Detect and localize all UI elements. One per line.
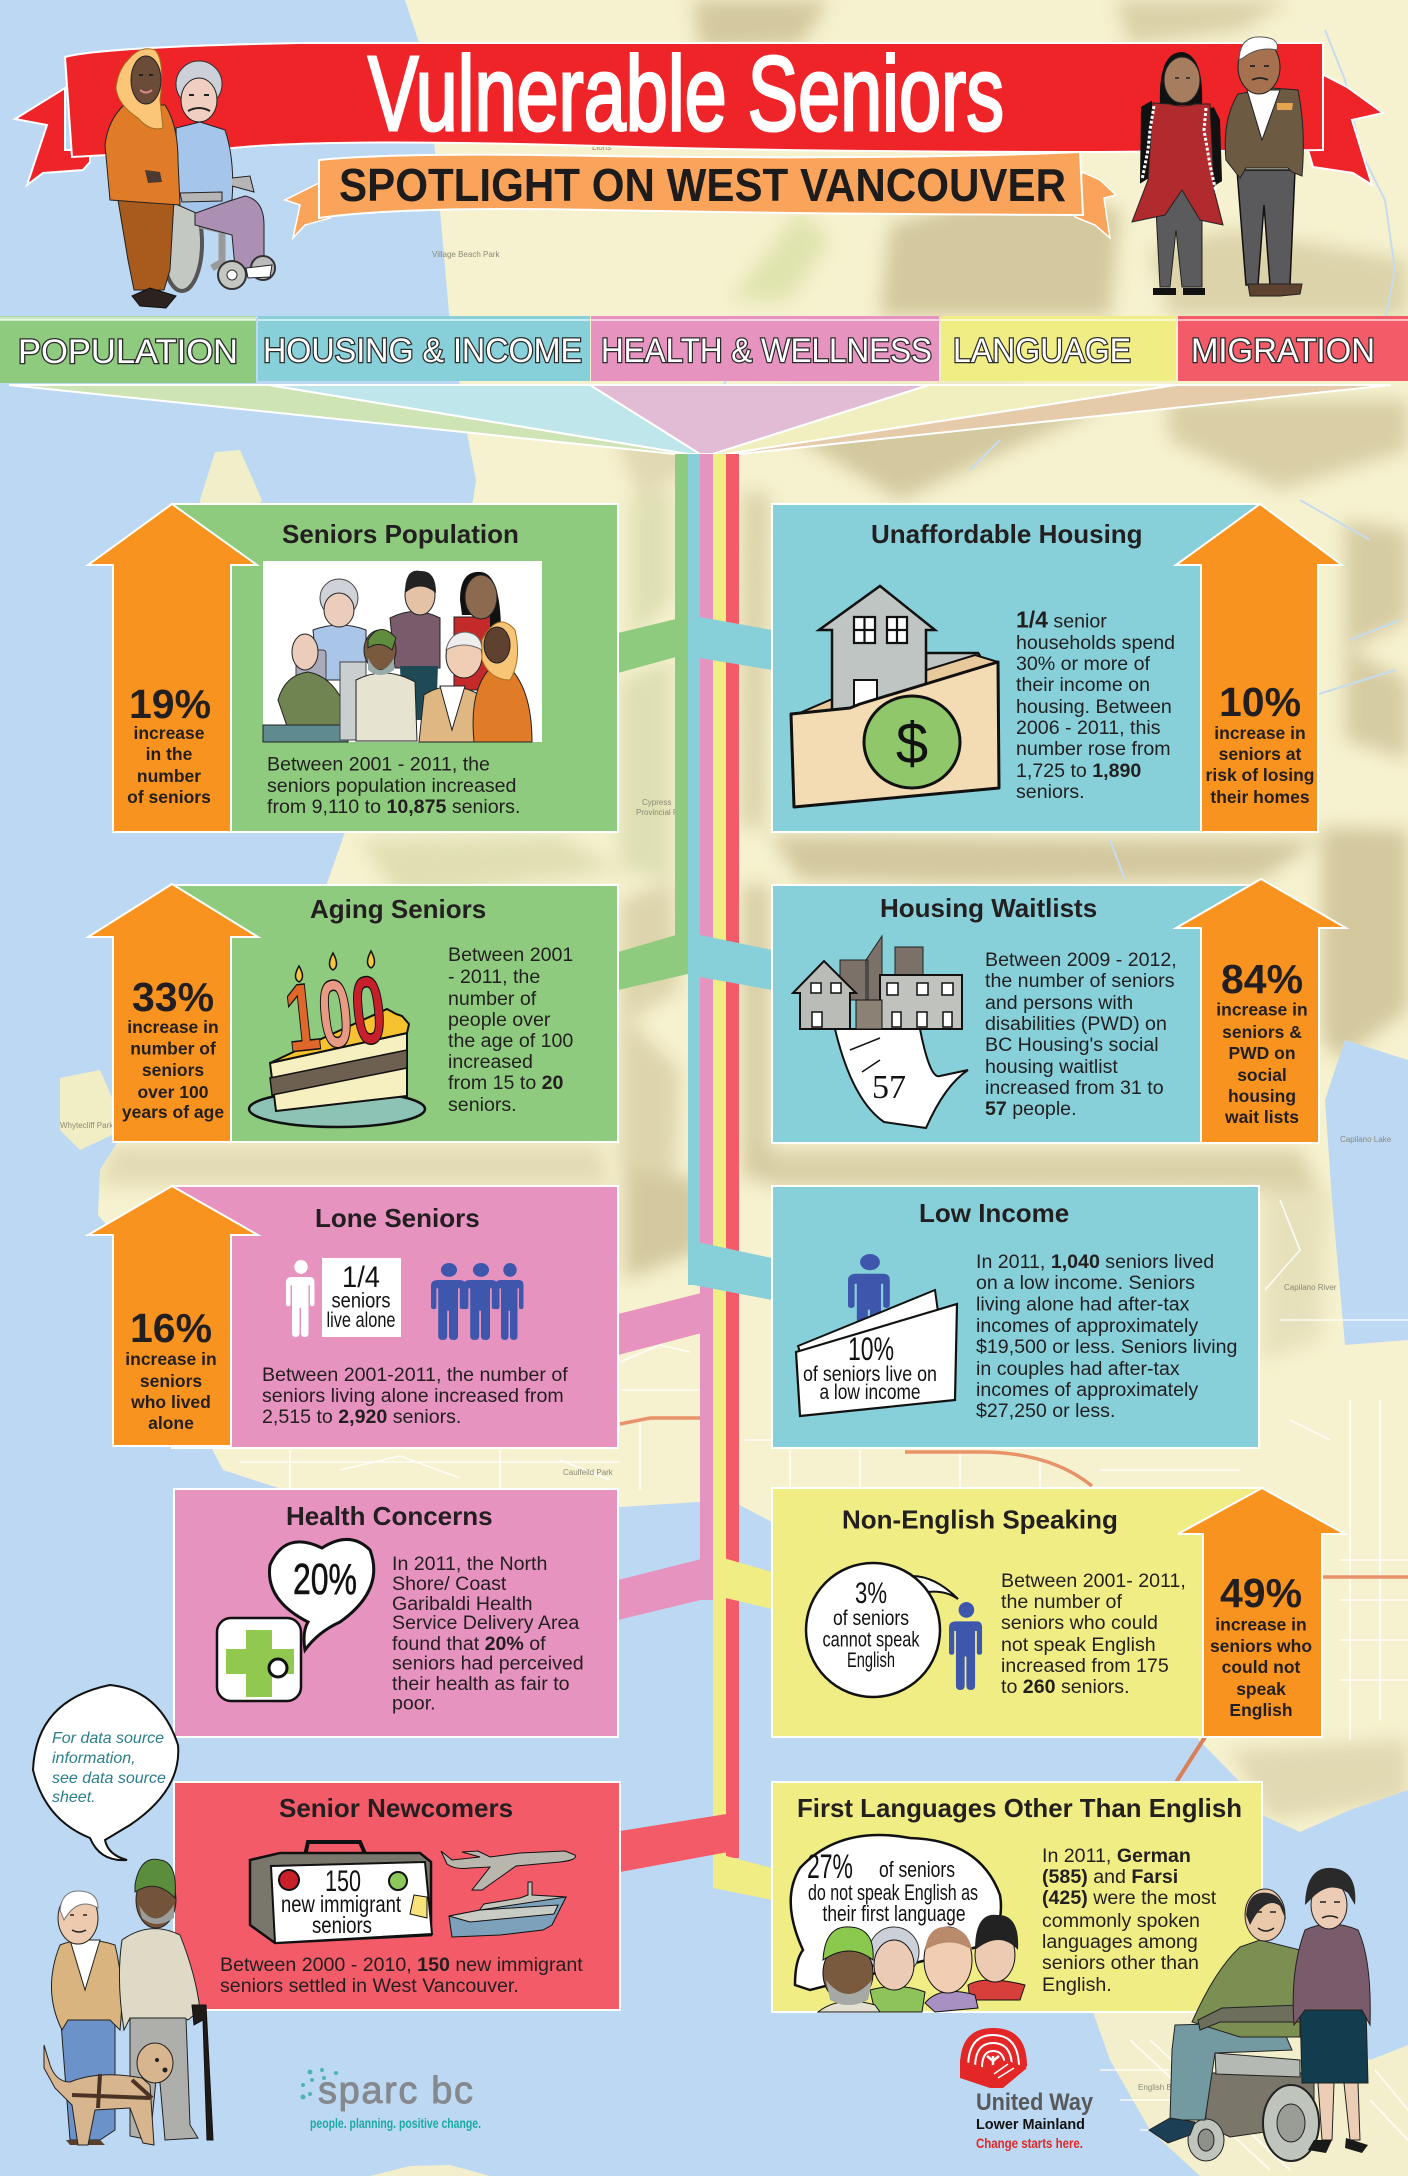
illustration: house in envelope: $ xyxy=(896,711,928,776)
map background: Village Beach Park xyxy=(432,250,500,259)
body text: Garibaldi Health xyxy=(392,1593,532,1615)
tab: health & wellness: HEALTH & WELLNESS xyxy=(601,332,932,370)
illustration: one in four seniors live alone: live alone xyxy=(326,1309,396,1332)
illustration: speech bubble and person: English xyxy=(847,1649,895,1672)
category tabs xyxy=(0,316,1408,383)
arrow: 33% increase: years of age xyxy=(122,1102,224,1122)
illustration: speech bubble and person xyxy=(806,1563,982,1697)
body text: Shore/ Coast xyxy=(392,1573,507,1595)
arrow: 84% increase: seniors & xyxy=(1222,1022,1302,1042)
body text: Service Delivery Area xyxy=(392,1612,579,1634)
logo: united way xyxy=(960,2028,1094,2151)
body text: In 2011, the North xyxy=(392,1553,547,1575)
illustration: one in four seniors live alone: seniors xyxy=(332,1290,390,1312)
arrow: 33% increase xyxy=(88,884,258,1142)
body text: In 2011, German xyxy=(1042,1845,1191,1867)
arrow: 19% increase: in the xyxy=(146,744,193,764)
heading: Seniors Population xyxy=(282,519,519,549)
heading: Senior Newcomers xyxy=(279,1793,513,1823)
body text: seniors other than xyxy=(1042,1952,1199,1974)
subtitle: SPOTLIGHT ON WEST VANCOUVER xyxy=(339,159,1066,211)
arrow: 49% increase xyxy=(1178,1488,1345,1737)
heading: Low Income xyxy=(919,1198,1069,1228)
arrow: 19% increase: increase xyxy=(133,723,205,743)
title: Vulnerable Seniors xyxy=(368,35,1004,153)
arrow: 19% increase: number xyxy=(137,766,201,786)
body text: increased xyxy=(448,1051,533,1073)
arrow: 16% increase: seniors xyxy=(140,1371,202,1391)
illustration: speech bubble and four faces: do not speak English as xyxy=(808,1880,978,1905)
body text: English. xyxy=(1042,1974,1112,1996)
arrow: 49% increase: 49% xyxy=(1220,1570,1302,1616)
logo: united way: Lower Mainland xyxy=(976,2116,1085,2133)
arrow: 84% increase: social xyxy=(1237,1065,1287,1085)
illustration: person and booklet: of seniors live on xyxy=(803,1363,937,1386)
arrow: 10% increase xyxy=(1176,504,1342,832)
tab: migration xyxy=(1178,316,1408,381)
body text: increased from 175 xyxy=(1001,1655,1169,1677)
arrow: 16% increase: who lived xyxy=(130,1392,211,1412)
arrow: 49% increase: increase in xyxy=(1215,1614,1307,1634)
illustration: one in four seniors live alone: 1/4 xyxy=(342,1261,380,1294)
map background: English Bay Park xyxy=(1138,2083,1200,2092)
body text: the age of 100 xyxy=(448,1030,573,1052)
map background: Whytecliff Park xyxy=(60,1121,114,1130)
illustration: suitcase, plane and ship: new immigrant xyxy=(281,1891,401,1917)
body text: $19,500 or less. Seniors living xyxy=(976,1336,1237,1358)
body text: seniors who could xyxy=(1001,1612,1158,1634)
illustration: person and booklet: a low income xyxy=(820,1381,920,1404)
body text: increased from 31 to xyxy=(985,1077,1164,1099)
speech bubble: data source note xyxy=(33,1685,178,1860)
body text: poor. xyxy=(392,1692,436,1714)
arrow: 10% increase: seniors at xyxy=(1219,744,1302,764)
illustration: homes and waitlist paper xyxy=(793,936,968,1128)
tab: population xyxy=(0,316,256,383)
illustration: suitcase, plane and ship: 150 xyxy=(325,1865,361,1898)
arrow: 10% increase: 10% xyxy=(1219,679,1301,725)
illustration: speech bubble and person: cannot speak xyxy=(822,1628,920,1652)
colored trunk lines and connectors xyxy=(618,454,772,1900)
body text: the number of seniors xyxy=(985,970,1175,992)
arrow: 33% increase: 33% xyxy=(132,974,214,1020)
body text: from 9,110 to 10,875 seniors. xyxy=(267,796,520,818)
body text: (585) and Farsi xyxy=(1042,1866,1178,1888)
speech bubble: data source note: see data source xyxy=(52,1770,166,1787)
illustration: birthday cake xyxy=(249,951,425,1127)
body text: languages among xyxy=(1042,1931,1198,1953)
illustration: suitcase, plane and ship xyxy=(250,1842,575,1943)
illustration: person and booklet xyxy=(796,1254,957,1416)
body text: found that 20% of xyxy=(392,1633,546,1655)
arrow: 10% increase: their homes xyxy=(1210,787,1310,807)
arrow: 33% increase: number of xyxy=(130,1038,216,1058)
body text: BC Housing's social xyxy=(985,1034,1159,1056)
body text: living alone had after-tax xyxy=(976,1294,1190,1316)
arrow: 10% increase: increase in xyxy=(1214,723,1306,743)
figures: man in power wheelchair and woman xyxy=(1149,1868,1370,2161)
heading: Aging Seniors xyxy=(310,894,486,924)
illustration: house in envelope xyxy=(791,586,999,807)
tab: language xyxy=(941,316,1176,381)
arrow: 49% increase: English xyxy=(1229,1700,1293,1720)
tab: language: LANGUAGE xyxy=(953,332,1131,370)
body text: 2,515 to 2,920 seniors. xyxy=(262,1406,461,1428)
panel: aging seniors xyxy=(88,884,618,1142)
arrow: 33% increase: seniors xyxy=(142,1060,204,1080)
illustration: birthday cake: 100 xyxy=(280,956,391,1073)
logo: sparc bc xyxy=(300,2068,481,2131)
orange subtitle ribbon xyxy=(285,152,1116,238)
body text: in couples had after-tax xyxy=(976,1358,1180,1380)
map background: Caulfeild Park xyxy=(563,1468,614,1477)
body text: seniors population increased xyxy=(267,775,516,797)
body text: 57 people. xyxy=(985,1098,1077,1120)
illustration: heart bubble and medical cross xyxy=(217,1539,374,1701)
heading: Housing Waitlists xyxy=(880,893,1097,923)
arrow: 84% increase: 84% xyxy=(1221,956,1303,1002)
body text xyxy=(1001,1570,1186,1698)
body text: seniors had perceived xyxy=(392,1652,584,1674)
heading: Non-English Speaking xyxy=(842,1504,1118,1534)
body text xyxy=(392,1553,584,1714)
figures: senior woman in hijab and woman in wheelchair xyxy=(105,49,275,308)
arrow: 10% increase: risk of losing xyxy=(1206,765,1314,785)
speech bubble: data source note: For data source xyxy=(52,1730,164,1747)
illustration: suitcase, plane and ship: seniors xyxy=(312,1912,372,1938)
body text: Between 2001- 2011, xyxy=(1001,1570,1186,1592)
heading: Lone Seniors xyxy=(315,1203,480,1233)
panel: seniors population xyxy=(88,504,618,832)
arrow: 16% increase: 16% xyxy=(130,1305,212,1351)
body text: incomes of approximately xyxy=(976,1315,1198,1337)
body text: seniors. xyxy=(1016,781,1085,803)
illustration: speech bubble and four faces xyxy=(791,1835,1025,2012)
illustration: speech bubble and four faces: their first language xyxy=(822,1901,966,1926)
map background: Cypress xyxy=(642,798,671,807)
speech bubble: data source note: sheet. xyxy=(52,1789,96,1806)
map background: Lions xyxy=(592,143,611,152)
arrow: 49% increase: seniors who xyxy=(1210,1636,1312,1656)
map background: Provincial Park xyxy=(636,808,690,817)
logo: sparc bc: people. planning. positive change. xyxy=(310,2116,481,2131)
map background: Capilano River xyxy=(1284,1283,1337,1292)
body text: to 260 seniors. xyxy=(1001,1676,1130,1698)
body text: 1,725 to 1,890 xyxy=(1016,760,1141,782)
tab: population: POPULATION xyxy=(18,333,238,371)
illustration: speech bubble and four faces: of seniors xyxy=(879,1857,955,1882)
illustration: homes and waitlist paper: 57 xyxy=(872,1069,906,1106)
arrow: 33% increase: over 100 xyxy=(137,1082,209,1102)
body text: In 2011, 1,040 seniors lived xyxy=(976,1251,1214,1273)
arrow: 84% increase: housing xyxy=(1228,1086,1296,1106)
body text: households spend xyxy=(1016,632,1175,654)
panel: low income xyxy=(772,1186,1259,1448)
speech bubble: data source note: information, xyxy=(52,1750,136,1767)
body text: disabilities (PWD) on xyxy=(985,1013,1167,1035)
body text: and persons with xyxy=(985,992,1133,1014)
body text: housing. Between xyxy=(1016,696,1172,718)
body text xyxy=(262,1364,568,1428)
panel: housing waitlists xyxy=(772,879,1346,1143)
panel: non-english speaking xyxy=(772,1488,1345,1737)
body text xyxy=(1042,1845,1217,1996)
panel: first languages other than english xyxy=(772,1782,1262,2012)
body text: their income on xyxy=(1016,674,1150,696)
heading: Unaffordable Housing xyxy=(871,519,1143,549)
body text: from 15 to 20 xyxy=(448,1072,564,1094)
arrow: 16% increase: alone xyxy=(148,1413,194,1433)
tab: housing & income: HOUSING & INCOME xyxy=(263,332,582,370)
arrow: 84% increase: wait lists xyxy=(1224,1107,1299,1127)
body text: commonly spoken xyxy=(1042,1910,1200,1932)
tab: migration: MIGRATION xyxy=(1191,332,1375,370)
arrow: 49% increase: speak xyxy=(1236,1679,1286,1699)
arrow: 33% increase: increase in xyxy=(127,1017,219,1037)
map background: Capilano Lake xyxy=(1340,1135,1392,1144)
body text xyxy=(220,1954,583,1997)
tab: health & wellness xyxy=(591,316,939,381)
body text xyxy=(976,1251,1237,1422)
arrow: 84% increase xyxy=(1176,879,1346,1143)
body text: incomes of approximately xyxy=(976,1379,1198,1401)
body text: Between 2009 - 2012, xyxy=(985,949,1177,971)
panel: lone seniors xyxy=(88,1186,618,1448)
body text: (425) were the most xyxy=(1042,1887,1217,1909)
body text: 2006 - 2011, this xyxy=(1016,717,1161,739)
body text xyxy=(267,754,520,818)
arrow: 16% increase xyxy=(88,1186,258,1446)
body text xyxy=(1016,606,1175,803)
figures: woman in red vest and man in cardigan xyxy=(1132,37,1303,296)
heading: First Languages Other Than English xyxy=(797,1793,1242,1823)
body text: 30% or more of xyxy=(1016,653,1151,675)
body text: seniors living alone increased from xyxy=(262,1385,564,1407)
body text: housing waitlist xyxy=(985,1056,1118,1078)
heading: Health Concerns xyxy=(286,1501,493,1531)
body text xyxy=(985,949,1177,1120)
arrow: 19% increase xyxy=(88,504,257,832)
logo: sparc bc: sparc bc xyxy=(318,2070,473,2112)
illustration: person and booklet: 10% xyxy=(848,1331,894,1367)
illustration: group of seniors xyxy=(263,561,542,742)
illustration: speech bubble and four faces: 27% xyxy=(807,1848,853,1886)
body text: the number of xyxy=(1001,1591,1122,1613)
category fan xyxy=(9,385,1391,454)
body text: seniors. xyxy=(448,1094,517,1116)
body text: Between 2000 - 2010, 150 new immigrant xyxy=(220,1954,583,1976)
panel: health concerns xyxy=(174,1489,618,1737)
arrow: 49% increase: could not xyxy=(1222,1657,1301,1677)
body text: $27,250 or less. xyxy=(976,1400,1115,1422)
body text: seniors settled in West Vancouver. xyxy=(220,1975,519,1997)
arrow: 84% increase: PWD on xyxy=(1228,1043,1296,1063)
body text: Between 2001 - 2011, the xyxy=(267,754,490,776)
arrow: 84% increase: increase in xyxy=(1216,1000,1308,1020)
body text: number of xyxy=(448,988,537,1010)
body text: not speak English xyxy=(1001,1634,1156,1656)
body text: people over xyxy=(448,1009,551,1031)
body text: - 2011, the xyxy=(448,966,540,988)
illustration: speech bubble and person: of seniors xyxy=(833,1607,909,1630)
body text: number rose from xyxy=(1016,738,1171,760)
body text: Between 2001-2011, the number of xyxy=(262,1364,568,1386)
body text: their health as fair to xyxy=(392,1673,570,1695)
figures: two men with cane and guide dog xyxy=(44,1859,213,2145)
body text xyxy=(448,944,573,1116)
panel: senior newcomers xyxy=(174,1782,620,2010)
arrow: 19% increase: 19% xyxy=(129,681,211,727)
red title banner xyxy=(15,35,1383,185)
tab: housing & income xyxy=(258,316,590,381)
illustration: heart bubble and medical cross: 20% xyxy=(293,1555,357,1604)
arrow: 16% increase: increase in xyxy=(125,1349,217,1369)
body text: on a low income. Seniors xyxy=(976,1272,1195,1294)
logo: united way: Change starts here. xyxy=(976,2135,1083,2151)
logo: united way: United Way xyxy=(976,2089,1094,2116)
body text: Between 2001 xyxy=(448,944,573,966)
panel: unaffordable housing xyxy=(772,504,1342,832)
illustration: speech bubble and person: 3% xyxy=(855,1577,887,1610)
arrow: 19% increase: of seniors xyxy=(127,787,211,807)
body text: 1/4 senior xyxy=(1016,606,1107,632)
illustration: one in four seniors live alone xyxy=(286,1258,524,1340)
